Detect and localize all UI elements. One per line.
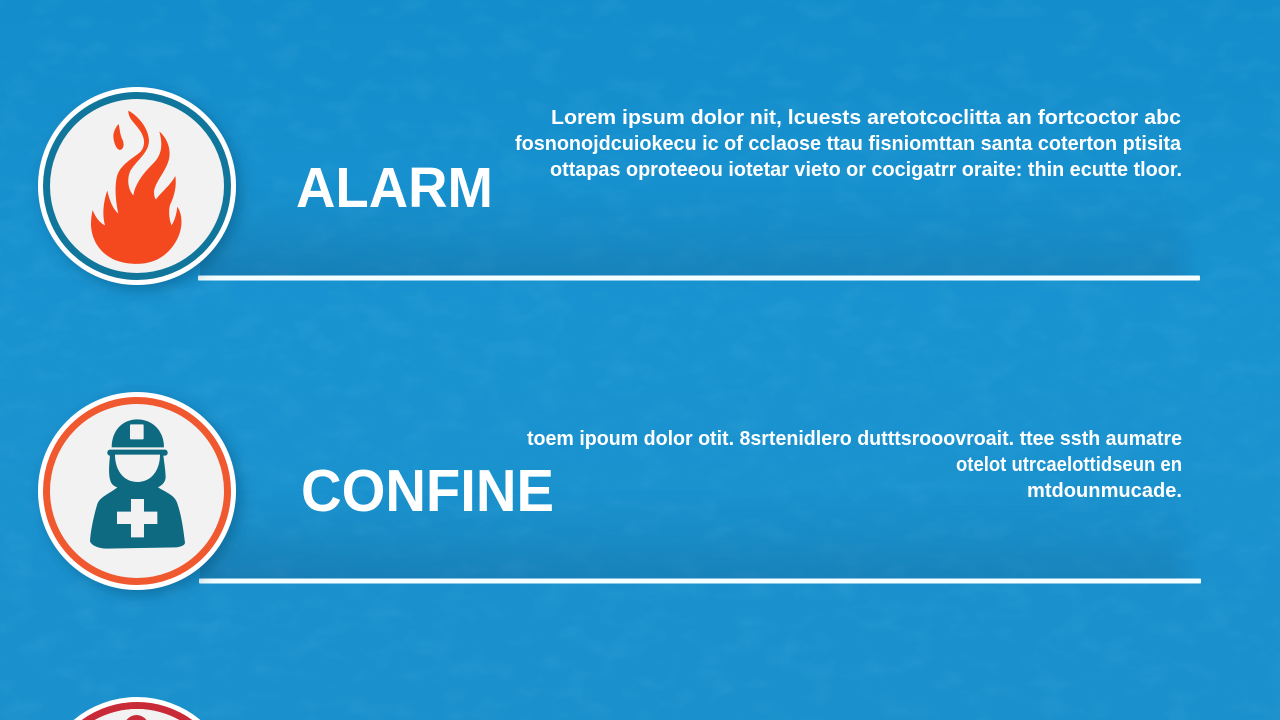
text block: confine description: toem ipoum dolor otit. 8srtenidlero dutttsrooovroait. ttee ssth aumatre bbox=[527, 428, 1182, 450]
text block: confine description bbox=[527, 428, 1182, 502]
text block: alarm description: fosnonojdcuiokecu ic of cclaose ttau fisniomttan santa coterton ptisita bbox=[515, 133, 1182, 155]
text block: confine description: otelot utrcaelottidseun en bbox=[956, 454, 1182, 476]
divider line bbox=[198, 276, 1200, 280]
icon: flame badge bbox=[38, 87, 236, 285]
divider line bbox=[199, 578, 1201, 584]
text block: confine description: mtdounmucade. bbox=[1027, 480, 1182, 502]
text block: alarm description: ottapas oproteeou iotetar vieto or cocigatrr oraite: thin ecutte tloor. bbox=[550, 159, 1182, 181]
row shadow band bbox=[200, 523, 1186, 578]
icon: responder badge bbox=[38, 392, 236, 590]
row shadow band bbox=[200, 219, 1186, 276]
text block: alarm description: Lorem ipsum dolor nit, lcuests aretotcoclitta an fortcoctor abc bbox=[551, 107, 1181, 129]
panel: confine row bbox=[38, 392, 1201, 590]
panel: alarm row bbox=[38, 87, 1200, 285]
panel: third row badge (cropped at bottom) bbox=[74, 697, 200, 720]
heading: confine: CONFINE bbox=[301, 458, 554, 524]
heading: alarm: ALARM bbox=[296, 156, 493, 220]
text block: alarm description bbox=[515, 107, 1182, 181]
